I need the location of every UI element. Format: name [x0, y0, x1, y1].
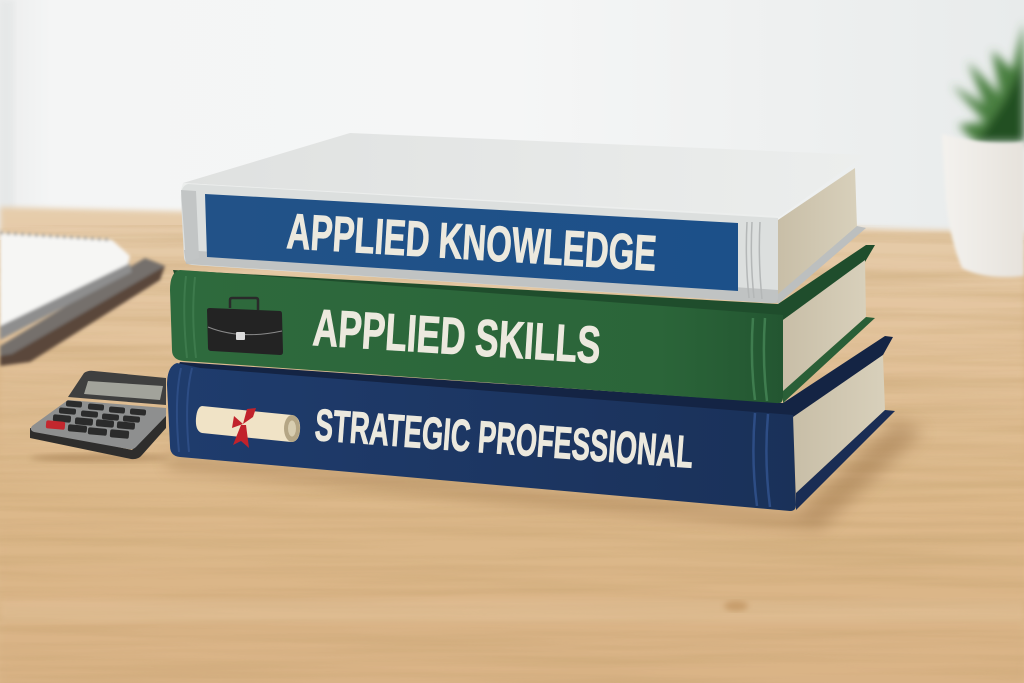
icon: diploma scroll [196, 406, 300, 448]
title: Applied Skills: APPLIED SKILLS [311, 299, 602, 375]
book: Applied Skills [170, 245, 875, 403]
calculator keys [46, 400, 146, 439]
calculator [30, 371, 170, 462]
icon: briefcase [207, 298, 283, 355]
title: Strategic Professional: STRATEGIC PROFESSIONAL [313, 399, 695, 478]
book: Applied Knowledge [181, 133, 866, 304]
book: Strategic Professional [167, 336, 895, 511]
blurred notebook and tablet [0, 233, 165, 366]
wooden desk [0, 207, 1024, 683]
blue title label [205, 194, 738, 291]
book stack shadow [165, 420, 925, 530]
background wall [0, 0, 1024, 240]
title: Applied Knowledge: APPLIED KNOWLEDGE [285, 203, 658, 282]
potted plant [942, 22, 1024, 277]
